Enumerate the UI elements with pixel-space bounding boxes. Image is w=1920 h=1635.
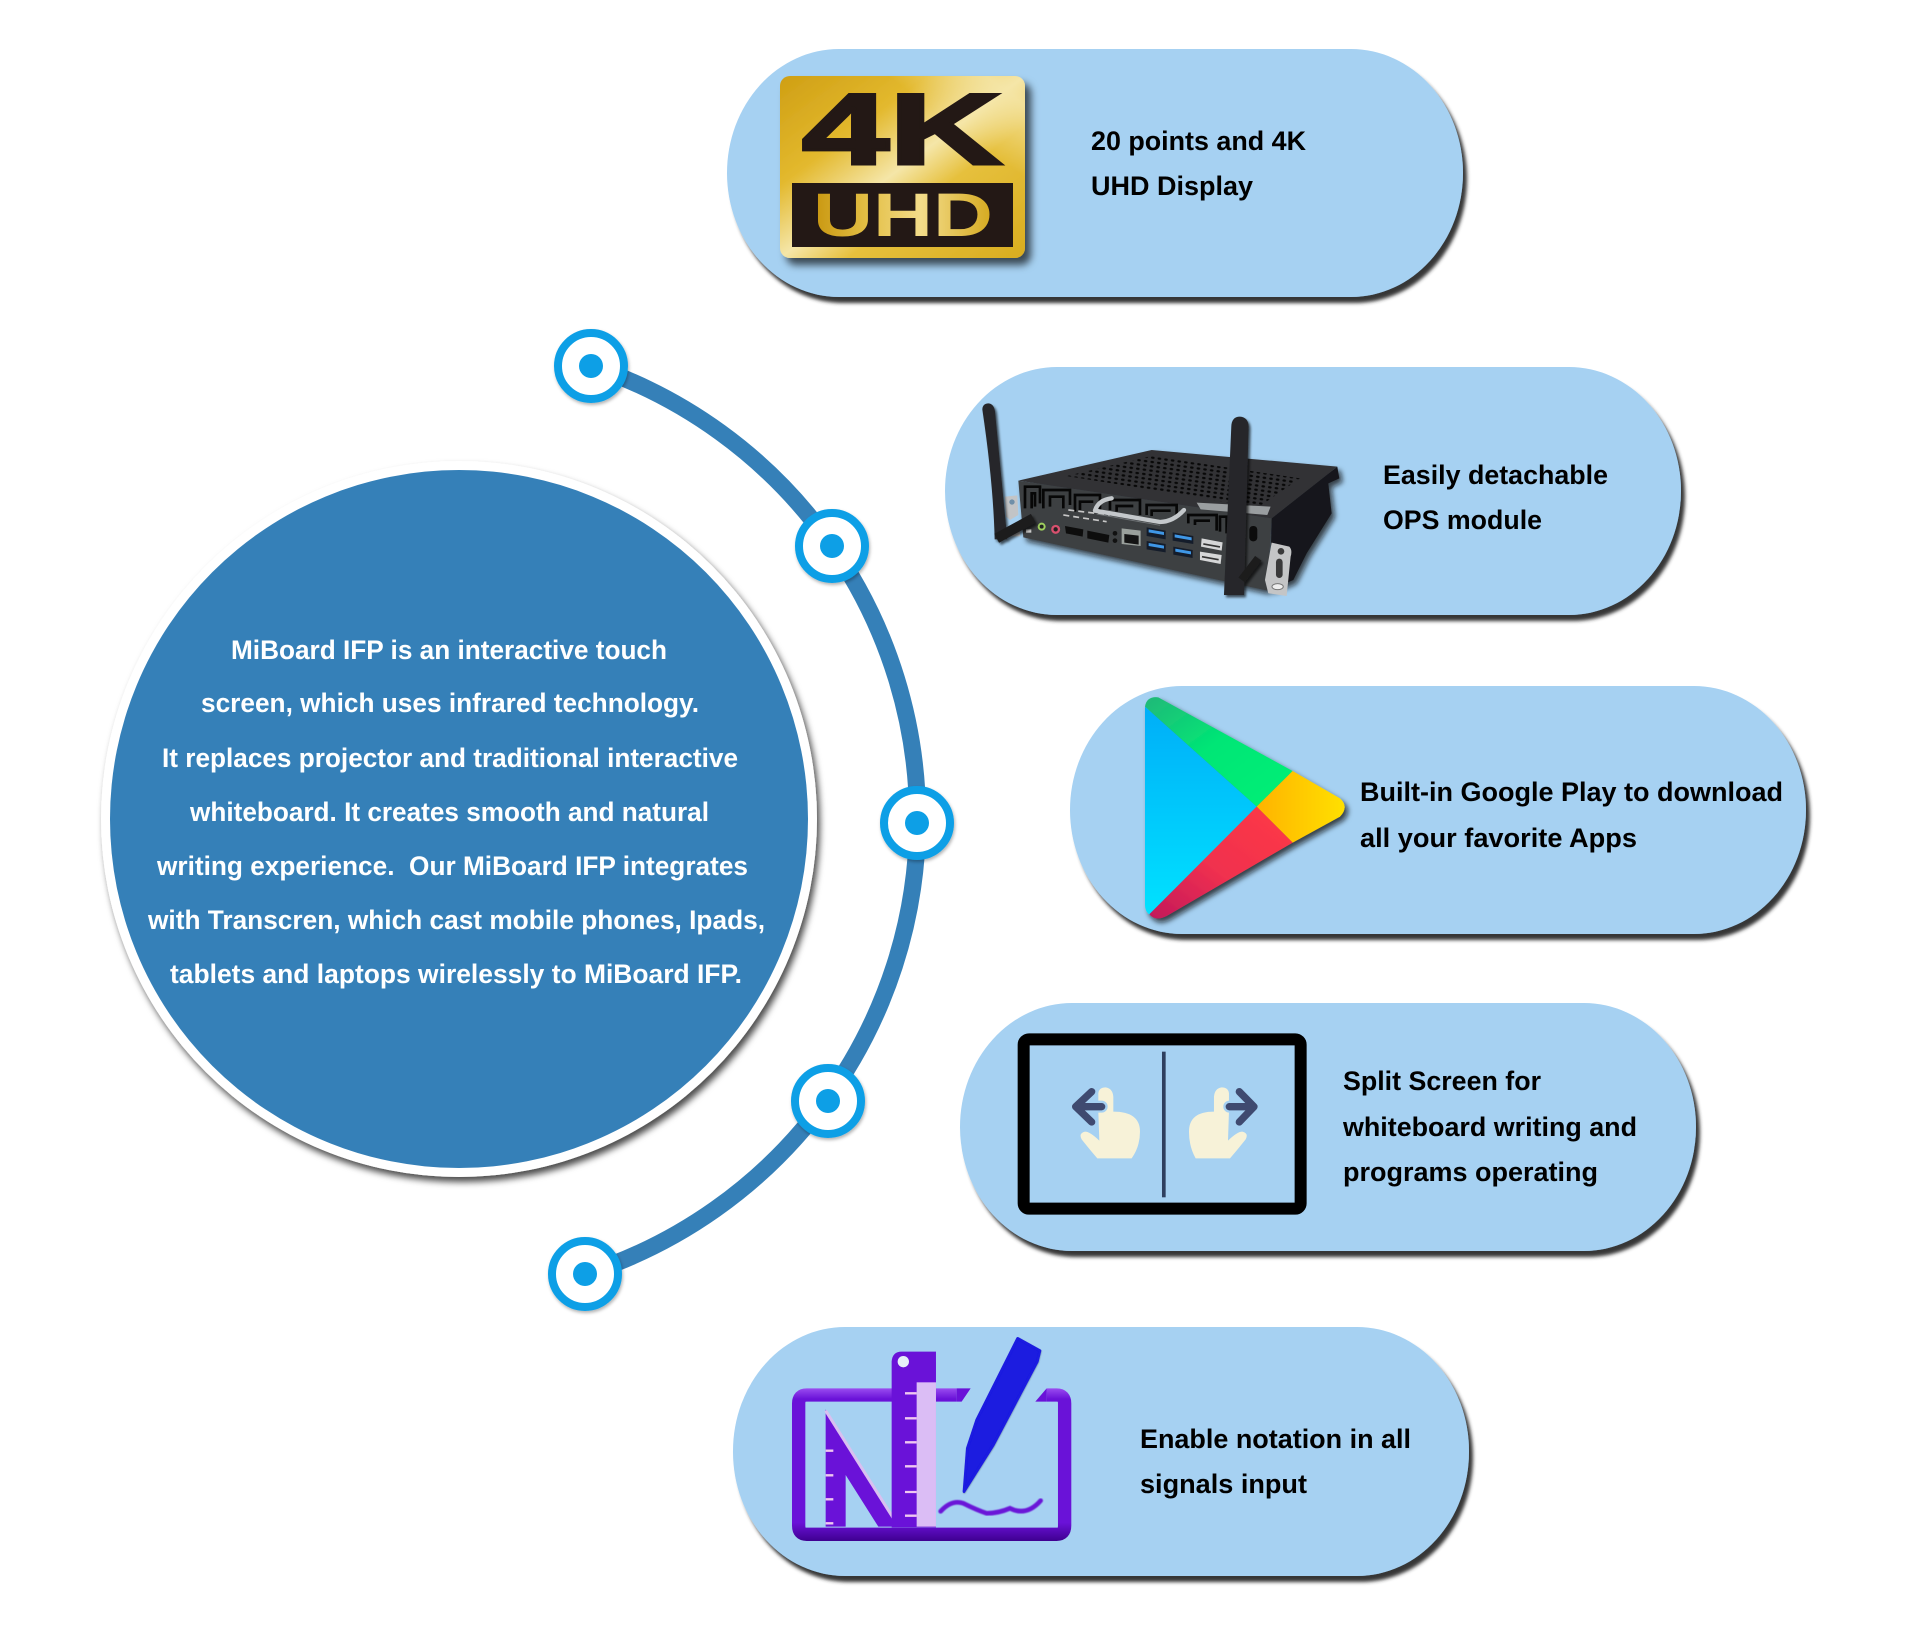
- USB 3 ports: [1147, 527, 1193, 558]
- right hand with arrow: [1189, 1087, 1254, 1158]
- network port: [1122, 528, 1141, 546]
- timeline node 2: [799, 513, 865, 579]
- ink squiggle: [941, 1501, 1041, 1513]
- text: description paragraph: screen, which uses infrared technology.: [201, 688, 699, 718]
- text: split screen label: whiteboard writing and: [1342, 1112, 1637, 1142]
- text: description paragraph: It replaces projector and traditional interactive: [162, 743, 738, 773]
- timeline node 1: [558, 333, 624, 399]
- text: 4K display label: [1091, 126, 1306, 201]
- pen: [964, 1338, 1040, 1492]
- front vent maze and ports, drawn in crop coordinates: [1025, 487, 1257, 564]
- panel: OPS module: [945, 367, 1681, 615]
- text: Google Play label: all your favorite Apps: [1360, 823, 1637, 853]
- set square: [826, 1409, 900, 1527]
- timeline node 4: [795, 1068, 861, 1134]
- panel: split screen: [960, 1003, 1696, 1251]
- text: OPS label: [1383, 460, 1608, 535]
- text: notation label: signals input: [1140, 1469, 1307, 1499]
- text: 4K display label: UHD Display: [1091, 171, 1253, 201]
- icon: 4K UHD gold badge: [780, 74, 1025, 258]
- icon: 4K UHD gold badge: 4K: [802, 74, 1002, 186]
- icon: Google Play triangle: [1145, 697, 1345, 918]
- icon: OPS computer module with antennas: [982, 403, 1339, 596]
- text: description paragraph: [147, 635, 765, 989]
- arc connector: [585, 366, 918, 1274]
- carrying handle: [1095, 498, 1184, 522]
- icon: ruler, set square and pen on a board: [799, 1338, 1065, 1534]
- text: description paragraph: with Transcren, which cast mobile phones, Ipads,: [147, 905, 765, 935]
- text: Google Play label: [1360, 777, 1783, 853]
- panel: notation: [733, 1327, 1469, 1576]
- timeline node 5: [552, 1241, 618, 1307]
- text: split screen label: Split Screen for: [1343, 1066, 1541, 1096]
- audio jacks: [1039, 524, 1045, 530]
- text: description paragraph: whiteboard. It creates smooth and natural: [189, 797, 709, 827]
- text: description paragraph: writing experience. Our MiBoard IFP integrates: [156, 851, 748, 881]
- text: notation label: [1140, 1424, 1411, 1499]
- icon: split screen with two gesture hands: [1024, 1039, 1301, 1209]
- video ports: [1065, 526, 1083, 537]
- text: split screen label: programs operating: [1343, 1157, 1598, 1187]
- ruler: [892, 1352, 936, 1527]
- text: Google Play label: Built-in Google Play to download: [1360, 777, 1783, 807]
- panel: centre circle with description: [101, 461, 817, 1177]
- USB 2 ports: [1201, 538, 1223, 551]
- text: description paragraph: MiBoard IFP is an interactive touch: [231, 635, 667, 665]
- bracket left: [1005, 495, 1018, 520]
- left hand with arrow: [1076, 1087, 1140, 1158]
- text: OPS label: Easily detachable: [1383, 460, 1608, 490]
- text: notation label: Enable notation in all: [1140, 1424, 1411, 1454]
- antennas: [982, 403, 1258, 595]
- text: 4K display label: 20 points and 4K: [1091, 126, 1306, 156]
- timeline node 3: [884, 790, 950, 856]
- text: split screen label: [1342, 1066, 1637, 1187]
- panel: Google Play: [1070, 686, 1806, 934]
- bracket right: [1265, 543, 1291, 596]
- panel: 4K UHD display: [727, 49, 1463, 297]
- icon: 4K UHD gold badge: UHD: [813, 181, 993, 249]
- text: description paragraph: tablets and laptops wirelessly to MiBoard IFP.: [170, 959, 742, 989]
- text: OPS label: OPS module: [1383, 505, 1542, 535]
